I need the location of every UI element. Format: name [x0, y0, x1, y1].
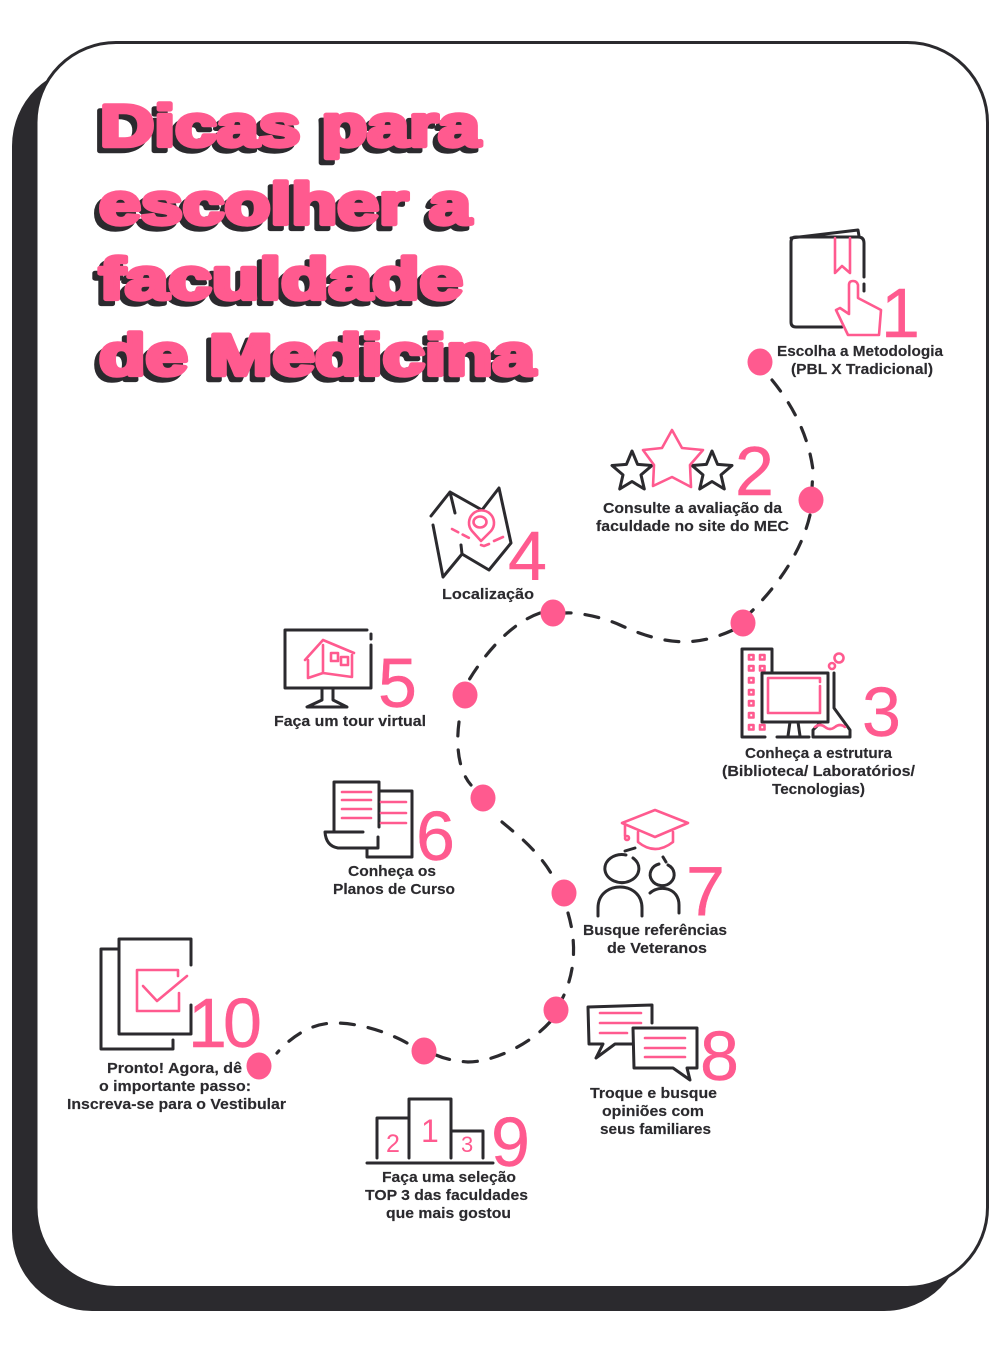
number 9: 9 [491, 1103, 530, 1181]
label 7: Busque referências [583, 922, 727, 939]
step 4 [431, 488, 547, 603]
label 2: Consulte a avaliação da [603, 500, 783, 517]
icon: podium: 1 [421, 1113, 439, 1149]
title: faculdade [99, 247, 463, 312]
label 9: TOP 3 das faculdades [365, 1187, 528, 1204]
icon: speech bubbles [588, 1005, 697, 1080]
icon: graduates with cap [598, 810, 688, 916]
label 5: Faça um tour virtual [274, 713, 426, 730]
route stops [246, 348, 824, 1080]
title: Dicas para [100, 94, 481, 159]
label 1 [777, 343, 944, 378]
step 9 [365, 1099, 530, 1222]
label 2 [596, 500, 789, 535]
label 10 [67, 1060, 286, 1113]
number 1: 1 [881, 274, 920, 352]
label 3: Conheça a estrutura [745, 745, 893, 762]
icon: checked form [101, 939, 191, 1049]
label 10: o importante passo: [99, 1078, 251, 1095]
label 6: Planos de Curso [333, 881, 455, 898]
title: escolher a [99, 172, 472, 237]
step 5 [274, 630, 426, 730]
label 10: Pronto! Agora, dê [107, 1060, 242, 1077]
label 10: Inscreva-se para o Vestibular [67, 1096, 286, 1113]
step 6 [325, 782, 455, 898]
icon: podium [367, 1099, 493, 1163]
icon: course plan documents [325, 782, 412, 857]
step 10 [67, 939, 286, 1113]
label 8: seus familiares [600, 1121, 711, 1138]
label 3 [722, 745, 916, 798]
label 1: Escolha a Metodologia [777, 343, 944, 360]
label 9 [365, 1169, 528, 1222]
icon: map with pin [431, 488, 511, 577]
label 2: faculdade no site do MEC [596, 518, 789, 535]
title: escolher a [94, 177, 467, 242]
dashed route [277, 380, 813, 1062]
label 4: Localização [442, 586, 534, 603]
icon: building, computer and flask [742, 649, 850, 737]
label 7 [583, 922, 727, 957]
label 3: (Biblioteca/ Laboratórios/ [722, 763, 916, 780]
label 6 [333, 863, 455, 898]
number 4: 4 [508, 517, 547, 595]
step 8 [588, 1005, 739, 1138]
icon: podium: 2 [386, 1130, 400, 1158]
step 2 [596, 430, 789, 535]
icon: book with hand [791, 230, 881, 335]
label 9: que mais gostou [386, 1205, 511, 1222]
number 7: 7 [686, 852, 725, 930]
number 2: 2 [735, 432, 774, 510]
title: de Medicina [94, 328, 531, 393]
label 3: Tecnologias) [772, 781, 865, 798]
number 10: 1 [188, 984, 227, 1062]
label 9: Faça uma seleção [382, 1169, 516, 1186]
label 8 [590, 1085, 717, 1138]
label 1: (PBL X Tradicional) [791, 361, 933, 378]
step 1 [777, 230, 944, 378]
label 8: opiniões com [602, 1103, 704, 1120]
title [94, 94, 536, 393]
label 8: Troque e busque [590, 1085, 717, 1102]
number 10: 0 [223, 984, 262, 1062]
title: faculdade [94, 252, 458, 317]
title: de Medicina [99, 323, 536, 388]
icon: podium: 3 [461, 1132, 473, 1157]
number 3: 3 [862, 673, 901, 751]
number 8: 8 [700, 1017, 739, 1095]
label 7: de Veteranos [607, 940, 707, 957]
title: Dicas para [95, 99, 476, 164]
step 3 [722, 649, 916, 798]
number 6: 6 [416, 797, 455, 875]
number 5: 5 [378, 644, 417, 722]
step 7 [583, 810, 727, 957]
label 6: Conheça os [348, 863, 436, 880]
icon: monitor with house [285, 630, 371, 707]
icon: three stars [612, 430, 732, 489]
